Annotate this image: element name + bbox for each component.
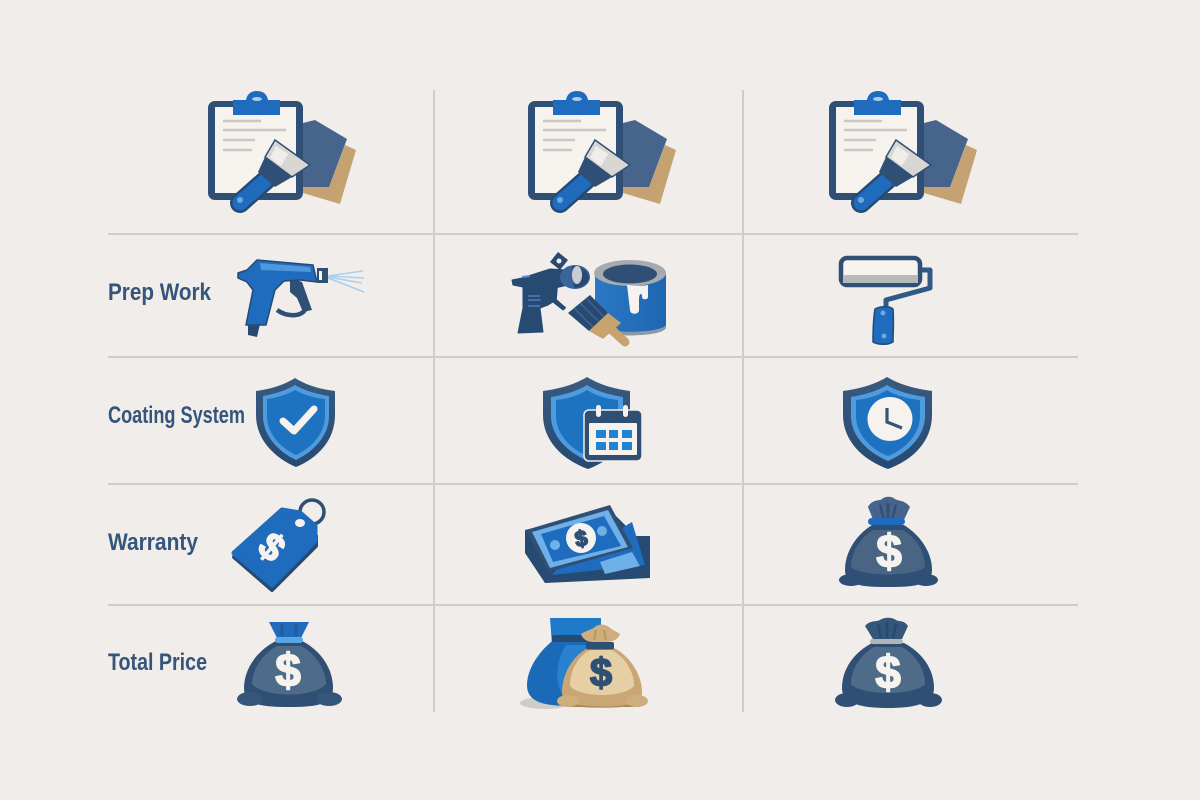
row label: Prep Work: Prep Work [108,279,212,306]
icon: prep kit, column 2 [528,91,676,204]
icon: spray gun, paint can and brush [512,252,666,342]
icon: prep kit, column 1 [208,91,356,204]
icon: paint roller [841,258,930,344]
icon: shield with clock [843,377,932,469]
icon: spray gun [238,260,364,337]
row label: Total Price: Total Price [108,649,207,676]
icon: shield with calendar [543,377,642,469]
icon: money bag with blue top [237,622,342,707]
icon: stack of cash [525,505,650,583]
icon: price tag [234,500,324,590]
icon: shield with check mark [256,378,335,467]
icon: price tag: $ [250,525,293,571]
icon: stack of cash: $ [573,525,589,552]
icon: money bag, navy with grey band [835,618,942,708]
icon: two money bags, blue and tan: $ [590,651,612,695]
icon: money bag, navy with blue band: $ [876,525,902,577]
icon: money bag, navy with blue band [839,497,938,587]
icon: money bag with blue top: $ [275,644,301,696]
icon: two money bags, blue and tan [520,618,648,709]
row label: Warranty: Warranty [108,529,199,556]
row label: Coating System: Coating System [108,402,245,429]
icon: prep kit, column 3 [829,91,977,204]
icon: money bag, navy with grey band: $ [875,646,901,698]
